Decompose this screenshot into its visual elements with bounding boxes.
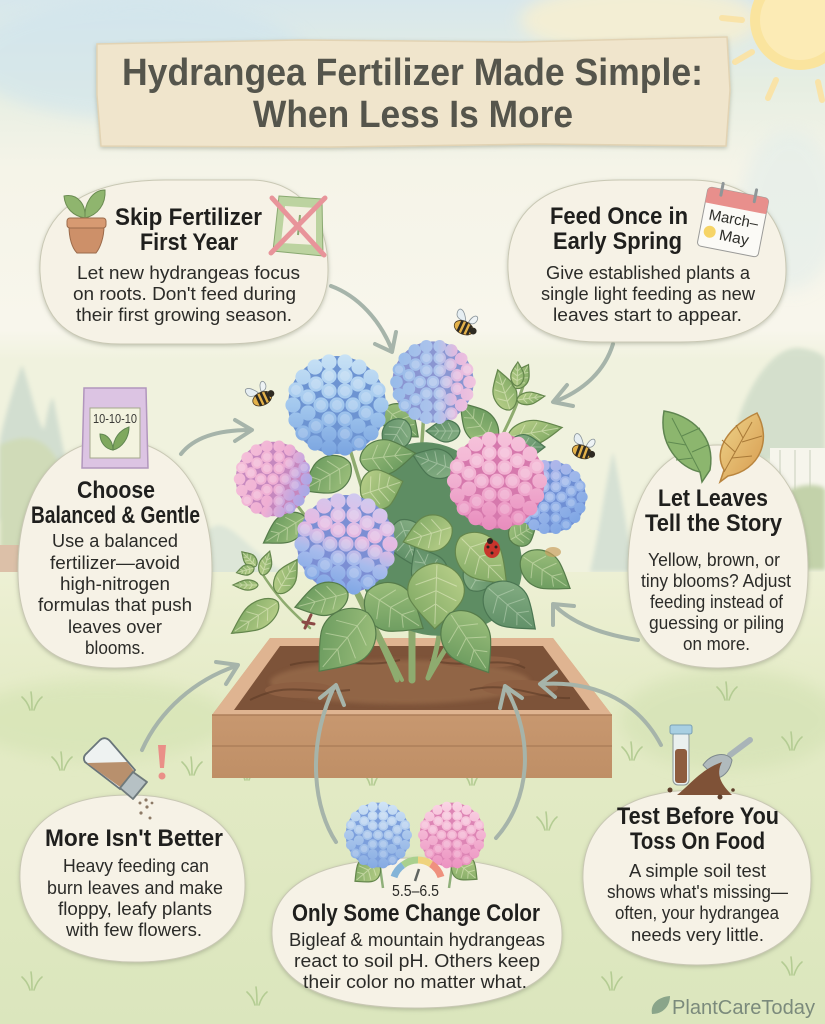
panel: only some change color xyxy=(272,802,562,1008)
flower: right blue xyxy=(512,460,588,534)
body text: Let new hydrangeas focus xyxy=(77,263,300,283)
body text: needs very little. xyxy=(631,925,764,945)
body text: on more. xyxy=(683,634,750,654)
title line 2: When Less Is More xyxy=(253,94,573,136)
heading: More Isn't Better xyxy=(45,825,223,852)
body text: on roots. Don't feed during xyxy=(73,284,296,304)
body text: floppy, leafy plants xyxy=(58,899,212,919)
body text: fertilizer—avoid xyxy=(50,553,180,573)
flower: top left blue xyxy=(285,354,389,456)
heading xyxy=(617,803,779,855)
heading xyxy=(115,204,262,256)
arrow: more isn't better xyxy=(142,662,238,750)
back leaves xyxy=(256,361,564,599)
icon: salt shaker of fertilizer xyxy=(84,738,153,820)
heading xyxy=(31,477,200,529)
body text: single light feeding as new xyxy=(541,284,756,304)
body text: Heavy feeding can xyxy=(63,856,209,876)
icon: mini blue and pink hydrangeas xyxy=(344,802,486,891)
body text: Give established plants a xyxy=(546,263,751,283)
icon: warning mark xyxy=(158,745,166,780)
heading xyxy=(645,485,783,537)
icon: green and yellow leaves xyxy=(663,411,763,482)
icon: 10-10-10 fertilizer bag: 10-10-10 xyxy=(93,411,137,426)
flower: large pink xyxy=(447,432,547,530)
icon: pH gauge xyxy=(394,860,441,881)
body text: often, your hydrangea xyxy=(615,903,780,923)
title line 1: Hydrangea Fertilizer Made Simple: xyxy=(122,52,703,94)
heading: First Year xyxy=(140,229,238,256)
heading: Only Some Change Color xyxy=(292,900,540,927)
body text xyxy=(47,856,223,940)
flower: lower blue and pink xyxy=(294,493,398,595)
heading: Feed Once in xyxy=(550,203,688,230)
arrow: feed once xyxy=(553,344,613,406)
heading xyxy=(550,203,688,255)
body text: shows what's missing— xyxy=(607,882,788,902)
arrows toward the plant xyxy=(142,286,661,842)
body text: formulas that push xyxy=(38,595,192,615)
heading: Toss On Food xyxy=(630,828,765,855)
panel: let leaves tell the story xyxy=(628,411,808,668)
foliage mass xyxy=(365,442,522,636)
heading: Choose xyxy=(77,477,155,504)
body text xyxy=(641,550,791,654)
body text xyxy=(289,930,545,992)
flower clusters xyxy=(234,340,588,595)
body text: A simple soil test xyxy=(629,861,766,881)
heading: Skip Fertilizer xyxy=(115,204,262,231)
body text xyxy=(607,861,788,945)
icon: 10-10-10 fertilizer bag xyxy=(82,388,148,468)
body text xyxy=(73,263,300,325)
icon: calendar: March– xyxy=(707,206,760,233)
body text: blooms. xyxy=(85,638,145,658)
icon: sun xyxy=(722,0,825,100)
heading: Test Before You xyxy=(617,803,779,830)
body text: leaves start to appear. xyxy=(553,305,742,325)
arrow: let leaves xyxy=(553,604,638,640)
hydrangea plant xyxy=(224,340,588,688)
raised garden bed xyxy=(212,638,612,778)
panel: feed once in early spring xyxy=(508,180,786,342)
body text: leaves over xyxy=(68,617,162,637)
icon: crossed-out fertilizer bag xyxy=(271,196,325,256)
arrow: only some, left xyxy=(316,685,344,842)
icon: calendar xyxy=(697,181,770,257)
icon: ladybug xyxy=(484,538,500,558)
icon: bee top xyxy=(450,308,483,339)
front leaves xyxy=(224,510,580,688)
stems xyxy=(260,370,528,680)
flower: top centre blue and pink xyxy=(390,340,476,424)
flower: left pink xyxy=(234,441,312,517)
heading: Balanced & Gentle xyxy=(31,502,200,529)
arrow: test before xyxy=(540,672,661,745)
body text: react to soil pH. Others keep xyxy=(294,951,540,971)
icon: soil test tube and scoop xyxy=(668,725,750,800)
panel: test before you toss on food xyxy=(583,725,811,965)
arrow: choose balanced xyxy=(181,420,252,454)
body text xyxy=(38,531,192,658)
heading: Tell the Story xyxy=(645,510,783,537)
body text xyxy=(541,263,756,325)
arrow: skip fertilizer xyxy=(331,286,396,352)
body text: Yellow, brown, or xyxy=(648,550,780,570)
icon: bee right xyxy=(568,433,600,463)
panel: skip fertilizer first year xyxy=(40,180,328,344)
title banner xyxy=(97,37,730,147)
body text: tiny blooms? Adjust xyxy=(641,571,791,591)
body text: Use a balanced xyxy=(52,531,178,551)
bees xyxy=(244,308,600,463)
heading: Early Spring xyxy=(553,228,682,255)
panel: more isn't better xyxy=(20,738,245,962)
body text: their color no matter what. xyxy=(303,972,527,992)
body text: burn leaves and make xyxy=(47,878,223,898)
panel: choose balanced and gentle xyxy=(18,388,212,668)
icon: seedling pot xyxy=(64,190,106,253)
body text: their first growing season. xyxy=(76,305,292,325)
body text: feeding instead of xyxy=(650,592,784,612)
watermark: PlantCareToday: PlantCareToday xyxy=(672,997,815,1019)
heading: Let Leaves xyxy=(658,485,768,512)
body text: with few flowers. xyxy=(65,920,202,940)
body text: Bigleaf & mountain hydrangeas xyxy=(289,930,545,950)
icon: bee left xyxy=(244,379,277,410)
icon: calendar: May xyxy=(718,227,751,249)
pH range label: 5.5–6.5 xyxy=(392,883,439,900)
body text: guessing or piling xyxy=(649,613,784,633)
arrow: only some, right xyxy=(496,686,525,838)
body text: high-nitrogen xyxy=(60,574,170,594)
